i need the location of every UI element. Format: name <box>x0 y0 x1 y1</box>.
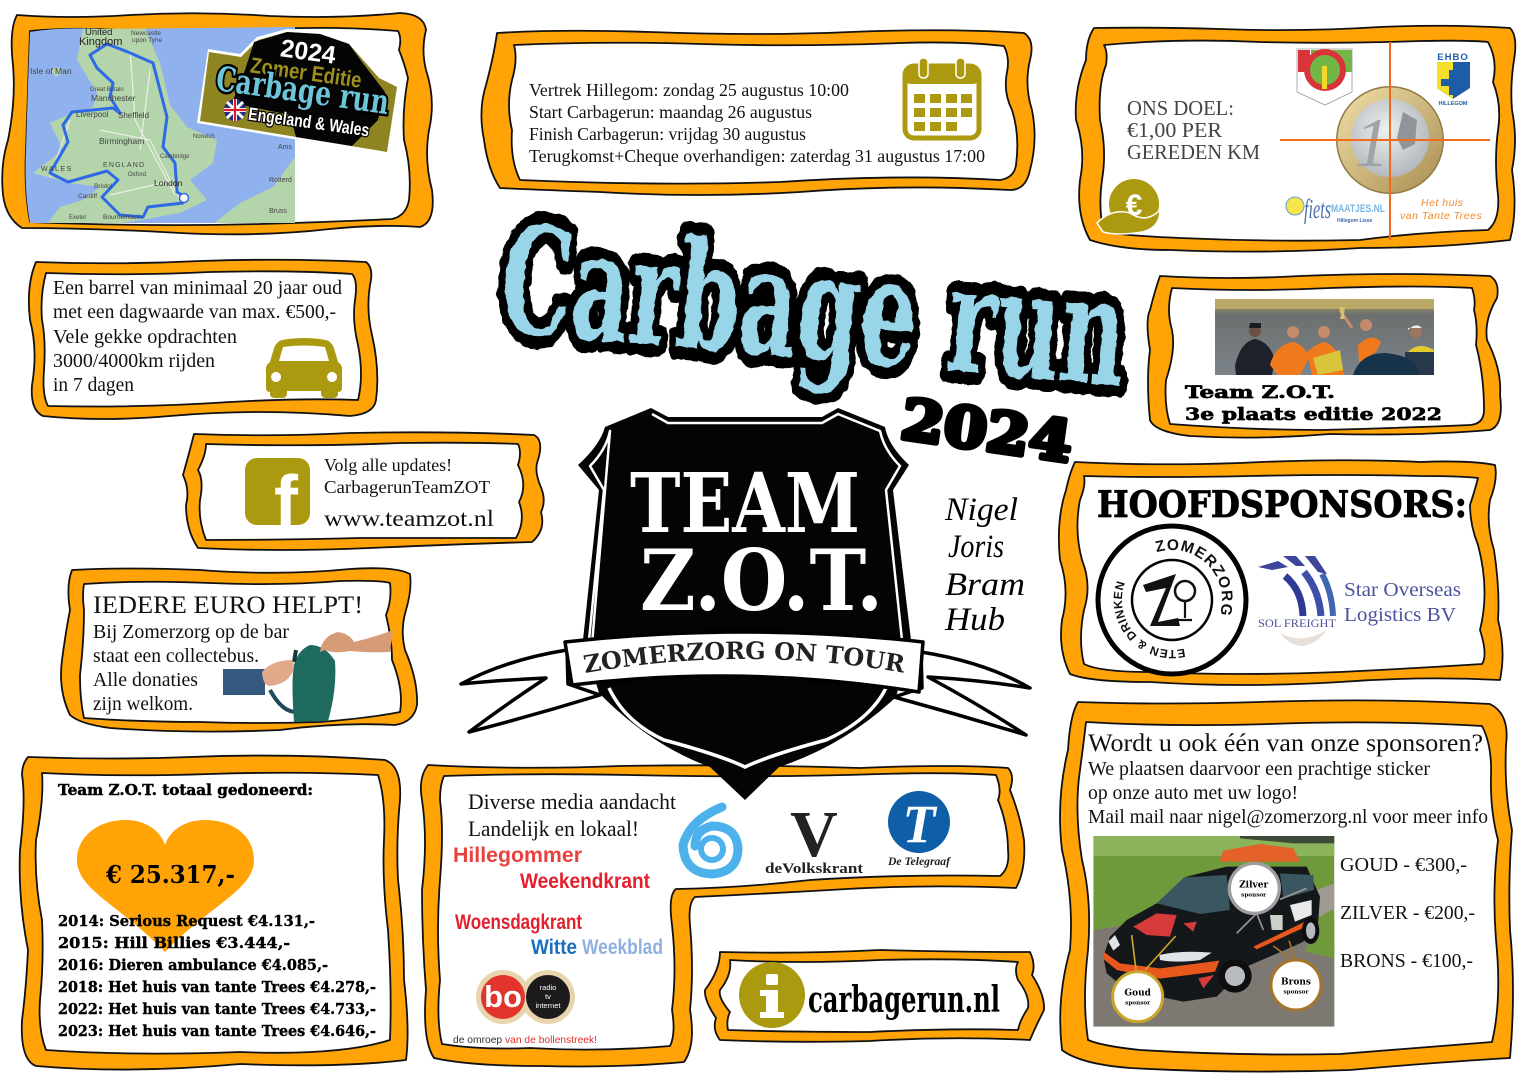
map place labels: London <box>154 178 183 188</box>
donation text: Bij Zomerzorg op de bar <box>93 622 290 643</box>
title year: 2024: 2024 <box>897 387 1077 476</box>
logo: Woensdagkrant Witte Weekblad: Woensdagkrant <box>455 911 582 934</box>
map place labels: Sheffield <box>118 111 149 120</box>
donation text <box>93 592 363 715</box>
photo: sponsored car <box>1093 836 1334 1027</box>
shield text: Z.O.T. <box>640 531 883 630</box>
musician left <box>1235 339 1275 375</box>
map place labels: Birmingham <box>99 136 144 146</box>
yearly donations list <box>58 912 376 1040</box>
team member names: Hub <box>944 602 1005 638</box>
map place labels: Oxford <box>128 172 146 178</box>
badge: Goud sponsor: sponsor <box>1125 1000 1151 1006</box>
facebook frame <box>183 432 544 550</box>
photo caption <box>1185 383 1442 425</box>
road map <box>25 27 295 227</box>
rally plate sticker: Engeland & Wales <box>247 104 371 140</box>
map place labels: upon Tyne <box>132 37 163 44</box>
logo: omroep bollenstreek: internet <box>535 1001 561 1010</box>
panel: become a sponsor <box>1060 700 1513 1072</box>
logo: omroep bollenstreek: tv <box>545 992 551 1001</box>
goal text: ONS DOEL: <box>1127 96 1234 120</box>
label: Het huis van Tante Trees: Het huis <box>1421 197 1464 209</box>
goal frame <box>1076 26 1515 252</box>
logo: Zomerzorg: ZOMERZORG <box>1155 539 1233 615</box>
panel: every euro helps <box>61 568 417 732</box>
map place labels: Great Britain <box>90 87 124 93</box>
logo: De Telegraaf: T <box>902 794 938 854</box>
donation text: Alle donaties <box>93 670 198 691</box>
sponsor call text: op onze auto met uw logo! <box>1088 783 1298 804</box>
badge: Zilver sponsor: sponsor <box>1241 892 1267 898</box>
icon: car <box>266 338 342 398</box>
photo caption: Team Z.O.T. <box>1185 383 1335 403</box>
yearly donations list: 2023: Het huis van tante Trees €4.646,- <box>58 1022 376 1040</box>
logo: EHBO: HILLEGOM <box>1438 101 1468 107</box>
map place labels: Cardiff <box>78 193 97 200</box>
badge: Goud sponsor <box>1113 972 1163 1022</box>
label: Het huis van Tante Trees <box>1400 197 1482 222</box>
link frame <box>705 950 1044 1042</box>
map place labels <box>30 27 292 221</box>
donation text: IEDERE EURO HELPT! <box>93 592 363 619</box>
media frame <box>421 765 1024 1066</box>
sponsor call text: We plaatsen daarvoor een prachtige sticker <box>1088 759 1431 780</box>
map place labels: WALES <box>41 166 73 173</box>
donation text: zijn welkom. <box>93 694 193 715</box>
barrel text: 3000/4000km rijden <box>53 351 215 372</box>
logo: Woensdagkrant Witte Weekblad: Weekblad <box>582 936 663 959</box>
photo frame <box>1148 274 1501 438</box>
orange shirts <box>1270 342 1309 375</box>
logo: De Telegraaf <box>887 791 951 868</box>
panel: team photo <box>1148 274 1501 438</box>
title: Carbage run: Carbage run <box>494 192 1134 422</box>
euro helps frame <box>61 568 417 732</box>
map place labels: Rotterd <box>269 177 292 184</box>
media text: Landelijk en lokaal! <box>468 816 639 841</box>
logo: Sol Freight <box>1258 556 1337 646</box>
sponsor call text: Mail mail naar nigel@zomerzorg.nl voor meer info <box>1088 807 1488 828</box>
logo: de Volkskrant: deVolkskrant <box>765 861 863 877</box>
goal text: €1,00 PER <box>1127 118 1222 142</box>
media text <box>468 789 676 841</box>
map frame <box>2 13 433 234</box>
logo: fietsmaatjes <box>1286 194 1385 224</box>
sponsor call text: Wordt u ook één van onze sponsoren? <box>1088 728 1483 757</box>
panel: travel dates <box>481 30 1035 195</box>
panel: main sponsors <box>1058 459 1504 686</box>
divider cross <box>1280 42 1490 240</box>
map place labels: Ams <box>278 144 292 151</box>
barrel text <box>53 278 342 396</box>
map place labels: ENGLAND <box>103 162 145 169</box>
icon: calendar <box>905 58 979 138</box>
team logo shield <box>459 408 1032 800</box>
panel: media attention <box>421 765 1024 1066</box>
map place labels: Bournemouth <box>103 214 142 221</box>
donated heading: Team Z.O.T. totaal gedoneerd: <box>58 781 313 799</box>
logo: Woensdagkrant Witte Weekblad: Witte <box>531 936 577 959</box>
panel: facebook and website <box>183 432 544 550</box>
sponsor prices: ZILVER - €200,- <box>1340 903 1475 924</box>
map place labels: Cambridge <box>160 154 190 160</box>
photo: collection box with hands <box>223 630 393 722</box>
barrel text: in 7 dagen <box>53 375 134 396</box>
panel: carbagerun.nl link <box>705 950 1044 1042</box>
donated total: € 25.317,- <box>105 860 235 889</box>
schedule text: Terugkomst+Cheque overhandigen: zaterdag 31 augustus 17:00 <box>529 146 985 166</box>
donation text: staat een collectebus. <box>93 646 259 667</box>
sponsor prices <box>1340 855 1475 972</box>
map place labels: Norwich <box>193 134 215 140</box>
schedule text <box>529 80 985 166</box>
media text: Diverse media aandacht <box>468 789 676 814</box>
icon: facebook: f <box>274 462 299 542</box>
icon: one euro coin: 1 <box>1354 105 1390 182</box>
become sponsor frame <box>1060 700 1513 1072</box>
barrel text: Een barrel van minimaal 20 jaar oud <box>53 278 342 299</box>
goal text: GEREDEN KM <box>1127 140 1260 164</box>
follow text <box>324 455 494 531</box>
rally plate sticker <box>197 29 399 155</box>
photo caption: 3e plaats editie 2022 <box>1185 405 1442 425</box>
team member names: Joris <box>948 529 1004 565</box>
map place labels: Newcastle <box>131 30 161 37</box>
logo: Zomerzorg: ETEN & DRINKEN <box>1114 581 1186 658</box>
ribbon banner <box>459 634 1032 737</box>
logo: omroep bollenstreek <box>453 970 597 1046</box>
yearly donations list: 2022: Het huis van tante Trees €4.733,- <box>58 1000 376 1018</box>
badge: Zilver sponsor: Zilver <box>1239 880 1268 890</box>
donated frame <box>20 756 408 1070</box>
map place labels: Bristol <box>94 183 113 190</box>
sponsor name: Star Overseas <box>1344 579 1461 601</box>
rally plate sticker: Zomer Editie <box>249 52 363 93</box>
logo: fietsmaatjes: MAATJES.NL <box>1331 203 1385 215</box>
panel: our goal <box>1076 26 1515 252</box>
barrel frame <box>29 260 377 419</box>
ribbon banner: ZOMERZORG ON TOUR <box>584 641 904 673</box>
logo: de Volkskrant <box>765 798 863 877</box>
map place labels: Kingdom <box>79 36 122 48</box>
map place labels: Isle of Man <box>30 66 72 76</box>
follow text: Volg alle updates! <box>324 455 452 475</box>
follow text: www.teamzot.nl <box>324 506 494 531</box>
label: Het huis van Tante Trees: van Tante Trees <box>1400 210 1482 222</box>
icon: union jack <box>224 99 246 121</box>
team member names: Nigel <box>944 492 1018 528</box>
schedule text: Finish Carbagerun: vrijdag 30 augustus <box>529 124 806 144</box>
icon: one euro coin <box>1336 86 1444 194</box>
panel: route map and rally plate <box>2 13 433 234</box>
badge: Brons sponsor: sponsor <box>1284 989 1309 995</box>
shield text <box>630 456 883 630</box>
logo: Hillegommer Weekendkrant <box>453 844 650 893</box>
sponsor call text <box>1088 728 1488 828</box>
icon: info <box>739 962 805 1028</box>
map place labels: Manchester <box>91 93 136 103</box>
url text: carbagerun.nl <box>808 979 1000 1021</box>
logo: omroep bollenstreek: bo <box>484 979 522 1014</box>
dates frame <box>481 30 1035 195</box>
team member names: Bram <box>945 567 1025 603</box>
logo: SBS6 <box>683 807 738 874</box>
schedule text: Start Carbagerun: maandag 26 augustus <box>529 102 812 122</box>
yearly donations list: 2015: Hill Billies €3.444,- <box>58 934 290 952</box>
goal text <box>1127 96 1260 164</box>
logo: Hillegommer Weekendkrant: Hillegommer <box>453 844 582 867</box>
logo: omroep bollenstreek: de omroep van de bollenstreek! <box>453 1034 597 1046</box>
logo: de Volkskrant: V <box>790 798 838 871</box>
map place labels: Bruss <box>269 208 287 215</box>
sponsor prices: GOUD - €300,- <box>1340 855 1467 876</box>
shield text: TEAM <box>630 456 860 552</box>
sponsor prices: BRONS - €100,- <box>1340 951 1473 972</box>
follow text: CarbagerunTeamZOT <box>324 477 490 497</box>
badge: Zilver sponsor <box>1229 863 1279 913</box>
yearly donations list: 2016: Dieren ambulance €4.085,- <box>58 956 328 974</box>
yearly donations list: 2014: Serious Request €4.131,- <box>58 912 315 930</box>
icon: euro in hand: € <box>1126 189 1143 222</box>
logo: De Telegraaf: De Telegraaf <box>887 854 951 868</box>
musician right <box>1408 346 1434 352</box>
logo: Zomerzorg <box>1096 524 1248 676</box>
logo: EHBO: EHBO <box>1437 52 1469 63</box>
icon: euro in hand <box>1097 179 1160 234</box>
sponsor name <box>1344 579 1461 626</box>
sponsors frame <box>1059 460 1503 685</box>
badge: Brons sponsor: Brons <box>1281 977 1311 987</box>
panel: total donated <box>20 756 408 1070</box>
logo: fietsmaatjes: Hillegom Lisse <box>1337 218 1373 224</box>
logo: omroep bollenstreek: radio <box>540 983 556 992</box>
icon: heart <box>77 820 254 952</box>
rally plate sticker: 2024 <box>279 34 338 70</box>
logo: Sol Freight: SOL FREIGHT <box>1258 616 1337 630</box>
rally plate sticker: Carbage run <box>214 59 391 123</box>
yearly donations list: 2018: Het huis van tante Trees €4.278,- <box>58 978 376 996</box>
logo: EHBO <box>1437 52 1470 107</box>
barrel text: met een dagwaarde van max. €500,- <box>53 302 336 323</box>
logo: Hill Billies shield <box>1297 49 1352 105</box>
badge: Goud sponsor: Goud <box>1124 988 1152 998</box>
icon: facebook <box>245 458 310 542</box>
barrel text: Vele gekke opdrachten <box>53 327 237 348</box>
map place labels: Exeter <box>69 215 86 221</box>
panel: barrel requirements <box>29 260 377 419</box>
badge: Brons sponsor <box>1271 960 1321 1010</box>
sponsors heading: HOOFDSPONSORS: <box>1097 484 1467 526</box>
logo: Hillegommer Weekendkrant: Weekendkrant <box>520 870 650 893</box>
map place labels: Liverpool <box>76 110 109 119</box>
team member names <box>944 492 1025 638</box>
schedule text: Vertrek Hillegom: zondag 25 augustus 10:00 <box>529 80 849 100</box>
logo: Woensdagkrant Witte Weekblad <box>455 911 663 959</box>
map place labels: United <box>85 27 112 38</box>
stage photo <box>1215 299 1434 375</box>
shield body <box>578 408 911 800</box>
logo: fietsmaatjes: fiets <box>1304 194 1331 224</box>
sponsor name: Logistics BV <box>1344 604 1457 626</box>
